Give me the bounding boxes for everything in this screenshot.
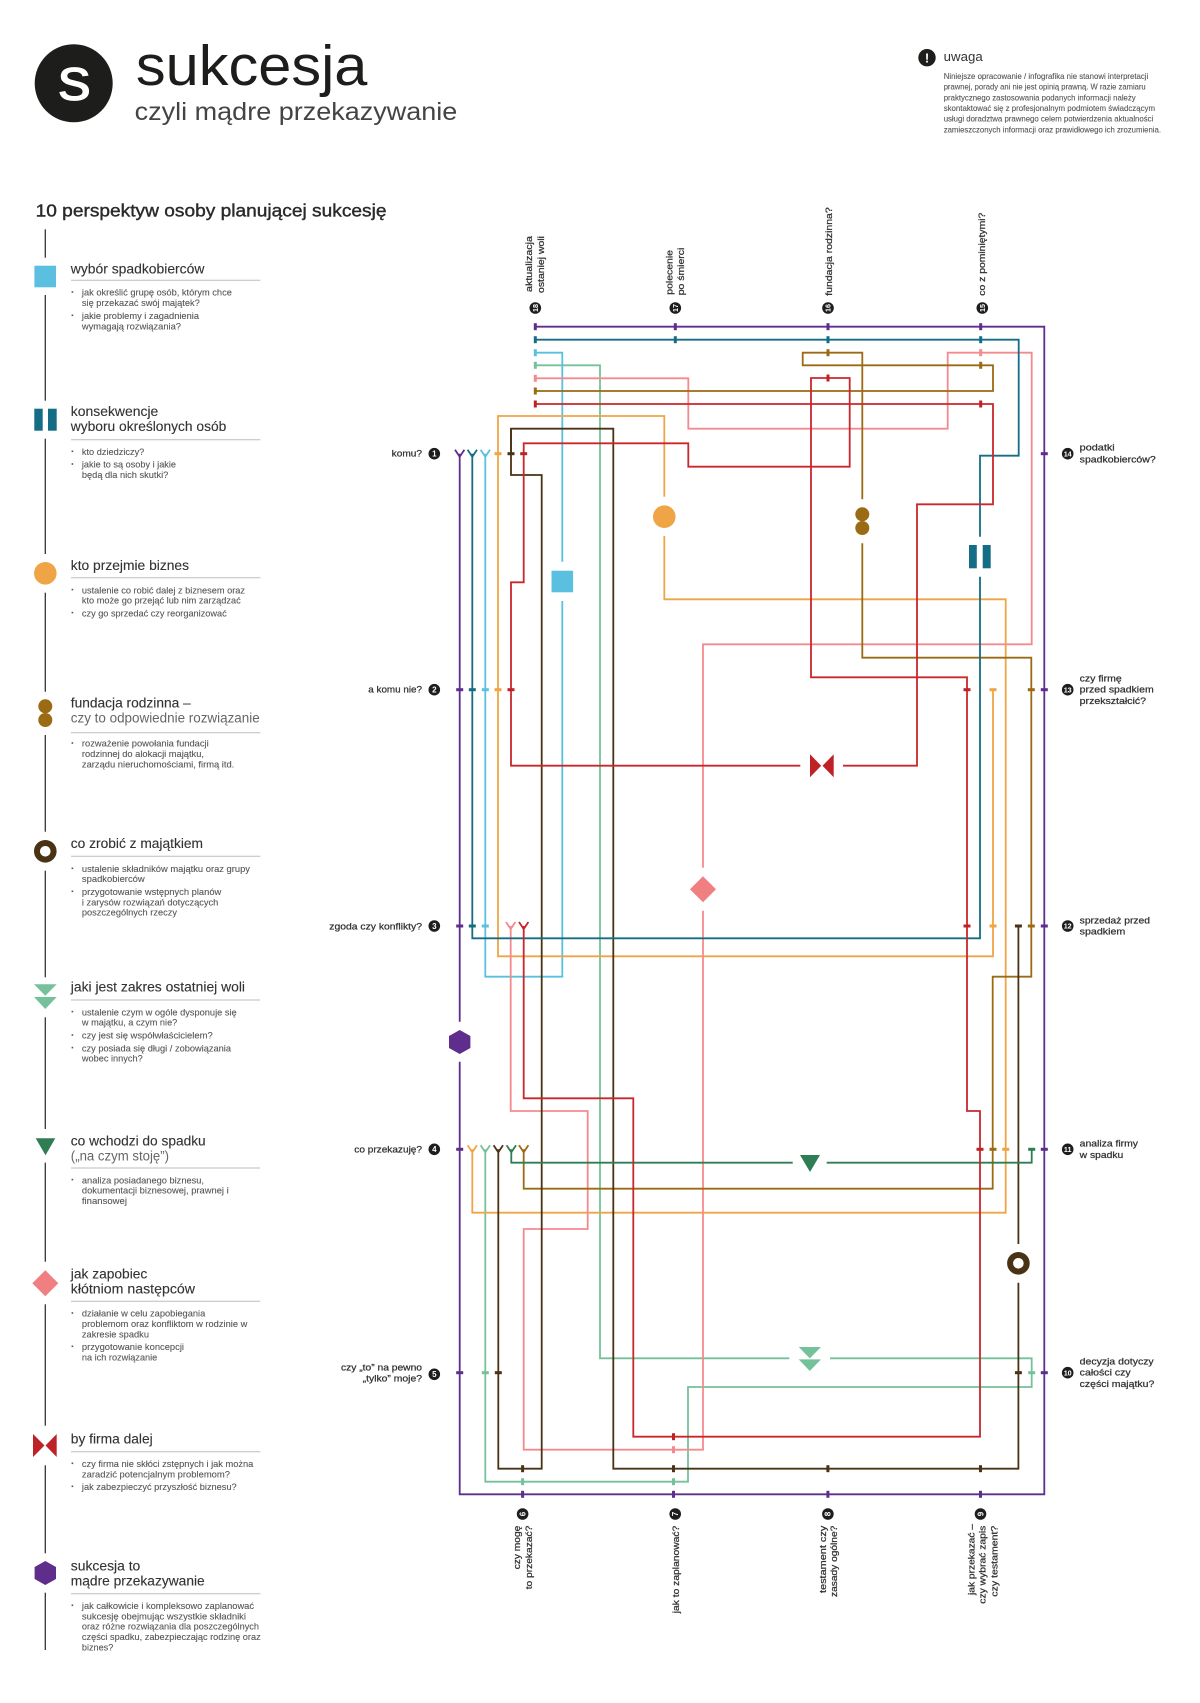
route: orange	[468, 416, 1006, 1213]
panel: co wchodzi do spadku: („na czym stoję”)	[71, 1148, 169, 1163]
panel: sukcesja to mądre przekazywanie: części spadku, zabezpieczając rodzinę oraz	[82, 1632, 261, 1642]
label 14: spadkobierców?	[1080, 454, 1156, 464]
panel: wybór spadkobierców: wybór spadkobierców	[70, 261, 205, 276]
panel: co wchodzi do spadku: co wchodzi do spadku	[71, 1133, 206, 1148]
label 13: 13	[1064, 685, 1072, 694]
panel: jak zapobiec: problemom oraz konfliktom w rodzinie w	[82, 1319, 248, 1329]
label 12	[1062, 915, 1150, 937]
panel: jak zapobiec: zakresie spadku	[82, 1329, 149, 1339]
panel: by firma dalej: czy firma nie skłóci zstępnych i jak można	[82, 1459, 253, 1469]
label 10: całości czy	[1080, 1368, 1131, 1378]
label 9: jak przekazać –	[966, 1523, 976, 1596]
station icon: red bowtie	[810, 754, 834, 777]
label 7: jak to zaplanować?	[671, 1526, 681, 1614]
label 10: części majątku?	[1080, 1379, 1154, 1389]
label 14: 14	[1064, 449, 1072, 458]
label 15: 15	[978, 304, 987, 312]
panel: co wchodzi do spadku: analiza posiadanego biznesu,	[82, 1175, 204, 1185]
station icon: light blue square	[552, 571, 573, 592]
icon: orange circle	[34, 562, 57, 585]
label 13: przed spadkiem	[1080, 685, 1154, 695]
icon: dark green triangle	[36, 1138, 55, 1155]
panel: zakres ostatniej woli: ustalenie czym w ogóle dysponuje się	[82, 1007, 237, 1017]
label 17: po śmierci	[676, 248, 686, 295]
station icon: brown double circle	[855, 507, 869, 535]
panel: wybór spadkobierców: wymagają rozwiązania?	[81, 321, 181, 331]
label 13	[1062, 673, 1154, 706]
panel: zakres ostatniej woli: czy posiada się długi / zobowiązania	[82, 1043, 231, 1053]
panel: zakres ostatniej woli: wobec innych?	[81, 1054, 143, 1064]
label 7: 7	[671, 1511, 680, 1516]
label 15	[976, 213, 988, 314]
heading: 10 perspektyw: 10 perspektyw osoby planującej sukcesję	[36, 201, 387, 221]
panel: kto przejmie biznes: czy go sprzedać czy reorganizować	[82, 608, 227, 618]
label 18: ostaniej woli	[536, 236, 546, 293]
label 5: czy „to” na pewno	[341, 1363, 422, 1373]
station icon: donut	[1010, 1255, 1027, 1272]
label 3: zgoda czy konflikty?	[329, 921, 422, 931]
panel: sukcesja to mądre przekazywanie: jak całkowicie i kompleksowo zaplanować	[81, 1601, 255, 1611]
label 4: co przekazuję?	[354, 1144, 422, 1154]
station icon: purple hexagon	[449, 1030, 470, 1054]
label 2: 2	[432, 686, 437, 695]
chart: metro map of routes	[449, 323, 1048, 1498]
label 3	[329, 920, 440, 932]
bottom labels	[512, 1508, 999, 1614]
label 17	[665, 248, 686, 314]
panel: jak zapobiec: przygotowanie koncepcji	[82, 1342, 184, 1352]
route: teal	[468, 340, 1019, 938]
label 16	[822, 207, 834, 314]
label 8: zasady ogólne?	[829, 1526, 839, 1597]
callout text	[944, 50, 1161, 135]
label 17: polecenie	[665, 250, 675, 295]
title: sukcesja	[136, 34, 368, 97]
panel: konsekwencje: będą dla nich skutki?	[82, 470, 168, 480]
panel: co wchodzi do spadku: finansowej	[82, 1196, 127, 1206]
label 10	[1062, 1356, 1154, 1389]
label 18: aktualizacja	[524, 235, 534, 292]
top labels	[524, 207, 988, 314]
icon: red bowtie	[33, 1434, 57, 1457]
label 5: 5	[432, 1370, 437, 1379]
label 2	[368, 684, 440, 696]
panel: co zrobić z majątkiem: przygotowanie wstępnych planów	[82, 887, 222, 897]
panel: zakres ostatniej woli: w majątku, a czym nie?	[81, 1018, 177, 1028]
callout text: skontaktować się z profesjonalnym podmiotem świadczącym	[944, 104, 1155, 113]
label 1	[392, 448, 440, 460]
panel: by firma dalej: jak zabezpieczyć przyszłość biznesu?	[81, 1482, 237, 1492]
route: pink	[506, 353, 1032, 1450]
panel: wybór spadkobierców: jakie problemy i zagadnienia	[81, 311, 199, 321]
panel: by firma dalej: zaradzić potencjalnym problemom?	[82, 1469, 230, 1479]
label 2: a komu nie?	[368, 685, 422, 695]
logo: s badge	[35, 44, 113, 122]
label 4	[354, 1144, 440, 1155]
panel: jak zapobiec	[32, 1267, 260, 1362]
label 7	[669, 1508, 681, 1614]
label 11: w spadku	[1079, 1150, 1123, 1160]
icon: purple hexagon	[35, 1561, 56, 1585]
panel: wybór spadkobierców	[34, 261, 260, 331]
left labels	[329, 448, 440, 1384]
label 17: 17	[671, 304, 680, 312]
panel: co wchodzi do spadku: dokumentacji biznesowej, prawnej i	[82, 1186, 229, 1196]
label 11: 11	[1064, 1145, 1072, 1154]
panel: kto przejmie biznes: kto może go przejąć lub nim zarządzać	[82, 596, 241, 606]
label 11: analiza firmy	[1080, 1139, 1138, 1149]
station icon: orange circle	[653, 505, 676, 528]
callout text: uwaga	[944, 50, 983, 64]
panel: konsekwencje: kto dziedziczy?	[82, 447, 144, 457]
panel: kto przejmie biznes: ustalenie co robić dalej z biznesem oraz	[82, 585, 246, 595]
panel: kto przejmie biznes: kto przejmie biznes	[71, 558, 189, 573]
icon: exclamation	[918, 49, 936, 66]
label 12: spadkiem	[1080, 927, 1126, 937]
panel: by firma dalej: by firma dalej	[71, 1431, 153, 1446]
label 3: 3	[432, 922, 437, 931]
panel: sukcesja to mądre przekazywanie	[35, 1559, 261, 1652]
label 18	[524, 235, 546, 314]
route: dark brown	[494, 429, 1018, 1469]
station icon: green double triangle	[799, 1347, 821, 1371]
label 1: 1	[432, 450, 437, 459]
panel: fundacja rodzinna	[38, 696, 260, 769]
panel: fundacja rodzinna: czy to odpowiednie rozwiązanie	[71, 711, 260, 726]
icon: donut	[37, 843, 54, 860]
label 15: co z pominiętymi?	[977, 213, 987, 296]
icon: brown double circle	[38, 699, 52, 727]
timeline line	[44, 229, 46, 1650]
label 8: testament czy	[818, 1525, 828, 1593]
route: red	[511, 378, 993, 1437]
label 6	[512, 1508, 534, 1589]
panel: fundacja rodzinna: rodzinnej do alokacji majątku,	[82, 749, 204, 759]
panel: co zrobić z majątkiem: poszczególnych rzeczy	[82, 908, 178, 918]
callout text: prawnej, porady ani nie jest opinią prawną. W razie zamiaru	[944, 83, 1146, 92]
label 6: to przekazać?	[524, 1526, 534, 1589]
panel: kto przejmie biznes	[34, 558, 260, 618]
panel: co zrobić z majątkiem: spadkobierców	[82, 874, 145, 884]
route: brown	[519, 353, 1031, 1189]
panel: konsekwencje: konsekwencje	[71, 404, 158, 419]
panel: co zrobić z majątkiem: co zrobić z majątkiem	[71, 836, 203, 851]
icon: double triangle	[34, 984, 57, 1009]
panel: zakres ostatniej woli: jaki jest zakres ostatniej woli	[70, 980, 245, 995]
panel: sukcesja to mądre przekazywanie: sukcesję obejmując wszystkie składniki	[82, 1611, 246, 1621]
panel: co wchodzi do spadku	[36, 1133, 260, 1206]
icon: teal pause	[34, 409, 57, 431]
panel: co zrobić z majątkiem: i zarysów rozwiązań dotyczących	[82, 897, 218, 907]
callout text: usługi doradztwa prawnego celem potwierdzenia aktualności	[944, 115, 1154, 124]
label 9: czy testament?	[989, 1526, 999, 1597]
panel: zakres ostatniej woli	[34, 980, 260, 1064]
callout text: praktycznego zastosowania podanych informacji należy	[944, 93, 1136, 102]
label 5: „tylko” moje?	[363, 1374, 422, 1384]
label 9: 9	[976, 1511, 985, 1516]
label 8: 8	[824, 1511, 833, 1516]
panel: co zrobić z majątkiem	[37, 836, 260, 918]
label 5	[341, 1363, 440, 1384]
label 10: decyzja dotyczy	[1080, 1356, 1154, 1366]
label 9	[966, 1508, 999, 1604]
station icon: dark green triangle	[800, 1155, 820, 1172]
label 16: 16	[824, 304, 833, 312]
label 11	[1062, 1139, 1138, 1160]
label 1: komu?	[392, 449, 422, 459]
label 8	[818, 1508, 839, 1597]
label 10: 10	[1064, 1368, 1072, 1377]
title: czyli mądre przekazywanie	[135, 98, 457, 126]
panel: konsekwencje: jakie to są osoby i jakie	[81, 460, 176, 470]
label 9: czy wybrać zapis	[978, 1525, 988, 1604]
label 14	[1062, 443, 1156, 464]
panel: konsekwencje: wyboru określonych osób	[70, 419, 226, 434]
panel: jak zapobiec: jak zapobiec	[70, 1267, 148, 1282]
panel: wybór spadkobierców: się przekazać swój majątek?	[82, 298, 200, 308]
label 14: podatki	[1080, 443, 1115, 453]
panel: by firma dalej	[33, 1431, 260, 1492]
panel: jak zapobiec: kłótniom następców	[71, 1282, 195, 1297]
label 16: fundacja rodzinna?	[824, 207, 834, 296]
title	[135, 34, 457, 126]
panel: wybór spadkobierców: jak określić grupę osób, którym chce	[81, 288, 232, 298]
panel: jak zapobiec: na ich rozwiązanie	[82, 1352, 157, 1362]
panel: fundacja rodzinna: zarządu nieruchomościami, firmą itd.	[82, 759, 234, 769]
logo: s badge: s	[58, 46, 91, 113]
panel: fundacja rodzinna: fundacja rodzinna –	[71, 696, 191, 711]
station icon: teal pause	[969, 545, 991, 568]
icon: pink diamond	[32, 1270, 58, 1296]
route: purple	[455, 327, 1044, 1494]
route: green	[481, 365, 1032, 1482]
panel: konsekwencje	[34, 404, 260, 480]
panel: co zrobić z majątkiem: ustalenie składników majątku oraz grupy	[82, 864, 251, 874]
panel: fundacja rodzinna: rozważenie powołania fundacji	[82, 739, 209, 749]
ticks on lines	[456, 323, 1048, 1498]
station icon: pink diamond	[690, 876, 716, 902]
label 4: 4	[432, 1145, 437, 1154]
label 13: czy firmę	[1080, 673, 1122, 683]
label 12: sprzedaż przed	[1080, 915, 1150, 925]
label 6: czy mogę	[512, 1526, 522, 1569]
label 12: 12	[1064, 922, 1072, 931]
right labels	[1062, 443, 1156, 1389]
label 13: przekształcić?	[1080, 696, 1146, 706]
label 18: 18	[531, 304, 540, 312]
icon: exclamation: !	[925, 50, 929, 66]
panel: sukcesja to mądre przekazywanie: sukcesja to	[71, 1559, 140, 1574]
panel: zakres ostatniej woli: czy jest się współwłaścicielem?	[82, 1031, 213, 1041]
panel: sukcesja to mądre przekazywanie: oraz różne rozwiązania dla poszczególnych	[82, 1622, 259, 1632]
panel: jak zapobiec: działanie w celu zapobiegania	[82, 1309, 205, 1319]
panel: sukcesja to mądre przekazywanie: biznes?	[82, 1642, 113, 1652]
route: light blue	[481, 353, 562, 977]
route: dark green	[507, 1145, 1032, 1163]
callout: uwaga	[918, 49, 1161, 135]
callout text: Niniejsze opracowanie / infografika nie stanowi interpretacji	[944, 72, 1149, 81]
panel: sukcesja to mądre przekazywanie: mądre przekazywanie	[71, 1574, 205, 1589]
callout text: zamieszczonych informacji oraz prawidłowego ich zrozumienia.	[944, 126, 1161, 135]
label 6: 6	[518, 1511, 527, 1516]
icon: blue square	[34, 266, 56, 287]
